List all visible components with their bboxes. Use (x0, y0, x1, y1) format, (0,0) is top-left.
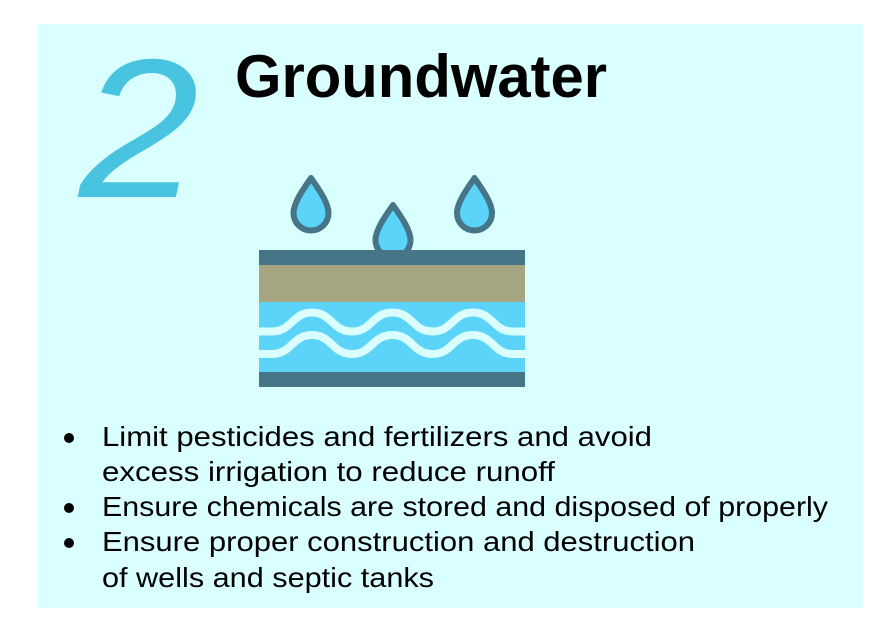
bottom rock layer (259, 372, 525, 387)
bullet 1 (64, 421, 652, 487)
icon: left water drop (294, 178, 328, 230)
icon: middle water drop (376, 205, 410, 258)
bullet list (64, 421, 828, 593)
icon: groundwater layers with drops (259, 178, 525, 387)
water layer (259, 302, 525, 372)
bullet 2: Ensure chemicals are stored and disposed of properly (102, 491, 828, 522)
big number 2: 2 (77, 18, 199, 239)
top rock layer (259, 250, 525, 265)
soil layer (259, 265, 525, 302)
title: Groundwater (235, 43, 607, 110)
bullet 3: Ensure proper construction and destruction (102, 526, 695, 557)
bullet 1: Limit pesticides and fertilizers and avoid (102, 421, 652, 452)
bullet 3 (64, 526, 695, 593)
upper wave (259, 312, 525, 332)
bullet 1: excess irrigation to reduce runoff (102, 456, 555, 487)
lower wave (259, 335, 525, 354)
bullet 3: of wells and septic tanks (102, 562, 434, 593)
icon: right water drop (457, 178, 492, 230)
